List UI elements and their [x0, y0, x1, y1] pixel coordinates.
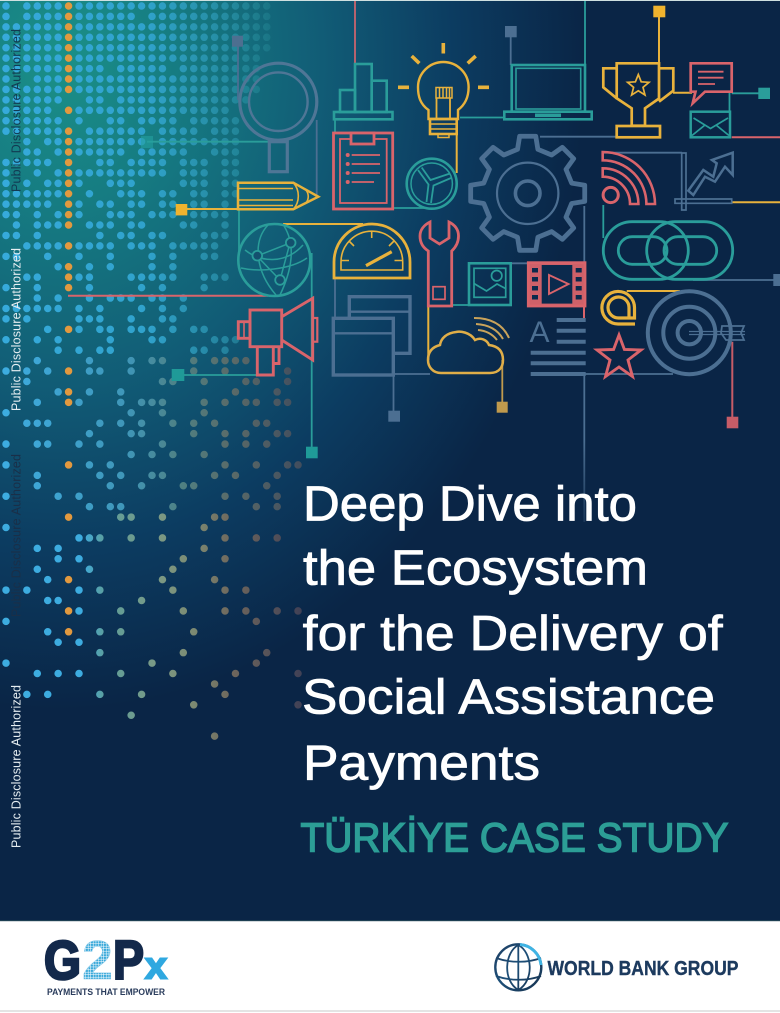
icon: envelope — [691, 112, 730, 137]
icon: wrench — [420, 222, 458, 306]
logo: G2Px: G — [44, 929, 81, 991]
icon: text document: A — [530, 316, 550, 349]
icon: gear — [471, 136, 585, 250]
logo: G2Px — [44, 929, 167, 997]
icon: RSS feed — [603, 152, 655, 204]
icon: speech bubble — [691, 63, 732, 103]
icon: pencil — [238, 183, 318, 209]
connector lines and end nodes — [68, 1, 780, 522]
icon: target with arrow — [648, 291, 745, 374]
icon: at sign — [602, 291, 635, 324]
dot matrix pattern — [6, 6, 298, 736]
icon: magnifying glass — [240, 63, 317, 172]
title: Deep Dive into — [303, 478, 637, 532]
icon: trophy — [603, 63, 673, 137]
logo: G2Px: P — [113, 929, 144, 991]
logo: G2Px: x — [145, 946, 167, 988]
icon: film strip with play button — [528, 263, 585, 306]
icon: overlapping windows — [333, 297, 410, 375]
logo: World Bank Group: WORLD BANK GROUP — [548, 957, 738, 980]
icon: clipboard — [334, 133, 393, 209]
icon: World Bank globe — [495, 944, 541, 990]
icon: picture frame — [469, 263, 511, 305]
icon: megaphone — [238, 298, 317, 375]
icon: bar chart building — [334, 64, 392, 119]
icon: speedometer gauge — [334, 224, 410, 278]
icon: light bulb — [398, 43, 489, 138]
icon: chain links — [603, 222, 733, 279]
footer band — [0, 920, 780, 1013]
title — [302, 478, 723, 790]
icon: growth arrow — [675, 153, 733, 210]
vertical watermark: Public Disclosure Authorized: Public Disclosure Authorized — [10, 29, 24, 192]
subtitle: TÜRKİYE CASE STUDY — [300, 815, 728, 861]
icon: star — [597, 335, 641, 376]
vertical watermark: Public Disclosure Authorized: Public Disclosure Authorized — [10, 454, 24, 617]
icon: laptop — [504, 65, 592, 119]
title: for the Delivery of — [303, 607, 723, 661]
logo: World Bank Group — [495, 944, 738, 990]
title: the Ecosystem — [303, 542, 648, 596]
logo: G2Px: PAYMENTS THAT EMPOWER — [47, 987, 165, 997]
title: Payments — [303, 736, 540, 790]
logo: G2Px: 2 — [82, 929, 113, 991]
icon: text document — [530, 316, 586, 374]
vertical watermark: Public Disclosure Authorized: Public Disclosure Authorized — [10, 248, 24, 411]
vertical watermark: Public Disclosure Authorized: Public Disclosure Authorized — [10, 685, 24, 848]
icon: cloud with wifi — [428, 318, 509, 373]
icon: pie chart circle — [407, 159, 457, 209]
title: Social Assistance — [302, 670, 715, 724]
icon: globe network — [238, 224, 310, 296]
vertical watermark: Public Disclosure Authorized — [10, 29, 24, 848]
